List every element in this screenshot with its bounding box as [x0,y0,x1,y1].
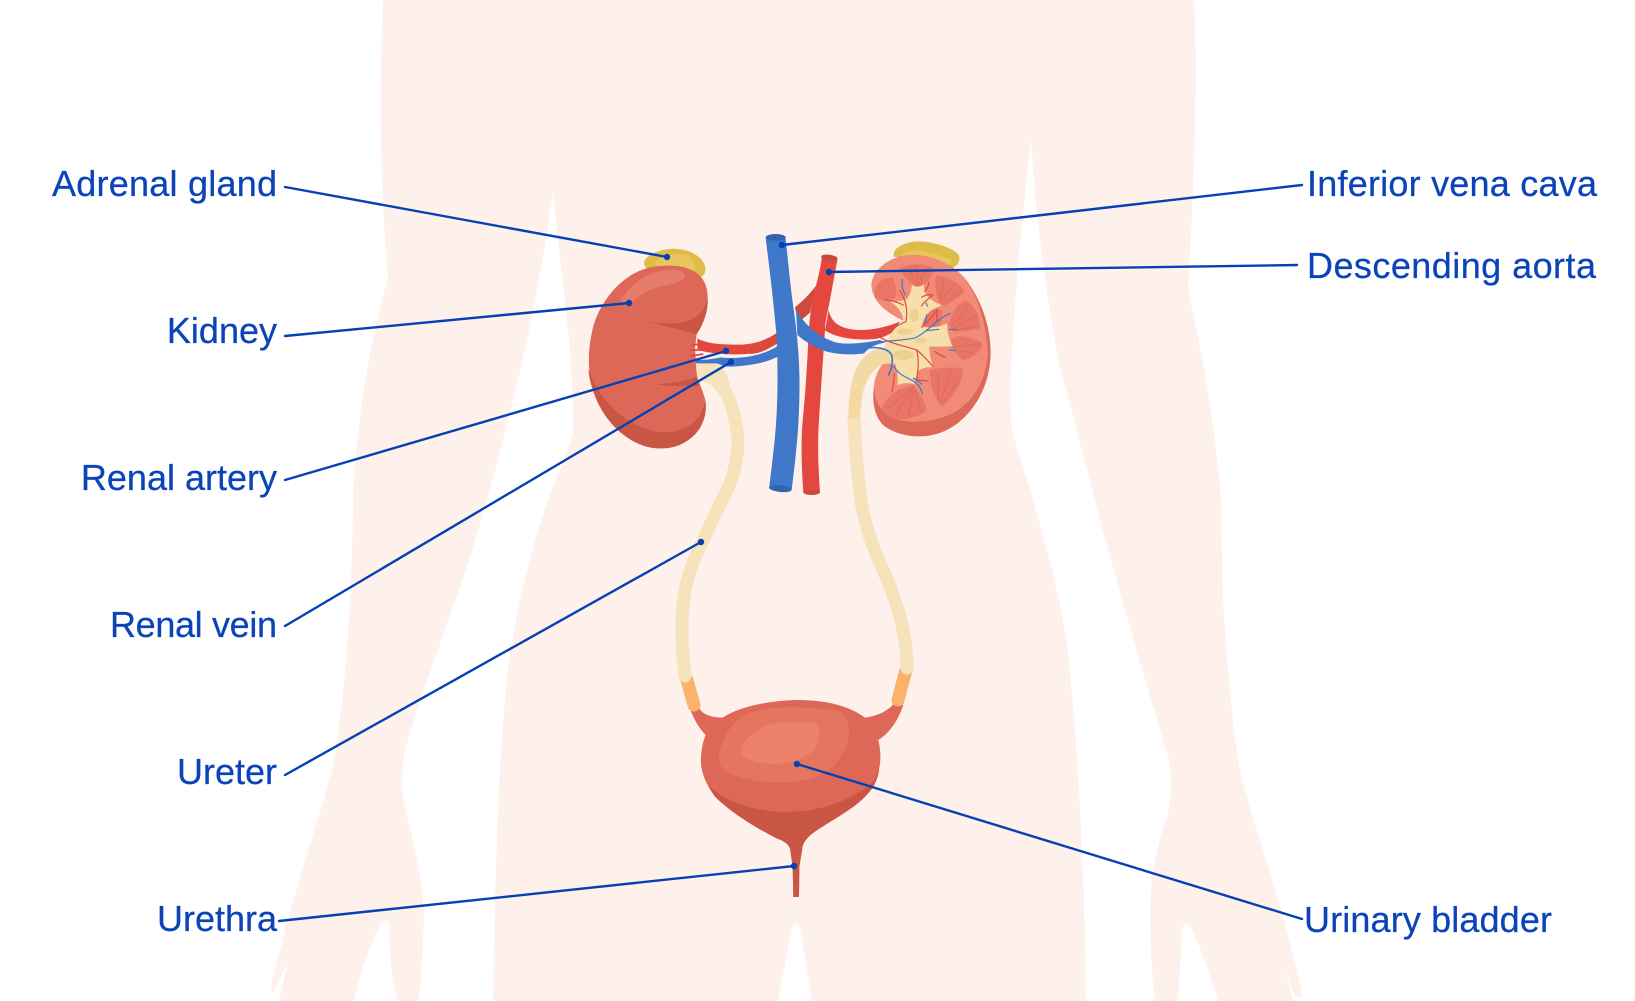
cortex [872,255,988,422]
label: Urinary bladder: Urinary bladder [1304,899,1552,940]
label: Inferior vena cava [779,163,1598,248]
renal branches: veins [867,279,957,394]
label: Renal artery [81,348,729,498]
right renal vein [796,308,892,375]
kidney upper shadow [647,298,708,334]
urinary bladder [690,700,903,897]
left renal artery [697,285,816,354]
pyramid fan lines [888,266,980,418]
label: Ureter: Ureter [177,751,277,792]
label: Adrenal gland [52,163,670,260]
renal branches: arteries [877,282,945,392]
left ureter [682,375,738,705]
right ureter [854,418,907,700]
left renal vein [696,343,793,367]
label: Ureter [177,539,704,792]
kidney lower notch shadow [656,377,700,386]
right renal pelvis and upper ureter [848,348,894,418]
label: Descending aorta: Descending aorta [1307,245,1597,286]
left kidney [588,266,708,448]
right kidney cross-section [867,255,991,436]
label: Urethra: Urethra [157,898,278,939]
label: Descending aorta [826,245,1597,286]
label: Renal vein: Renal vein [110,604,277,645]
organs group [588,234,991,495]
label: Urinary bladder [794,761,1552,940]
label: Renal vein [110,359,734,645]
pelvis ovals [893,308,927,360]
left renal pelvis [697,363,730,397]
label: Kidney [167,300,632,351]
hilum vessels [691,344,703,356]
body silhouette [271,0,1302,1001]
label: Renal artery: Renal artery [81,457,277,498]
inferior vena cava [766,234,800,493]
renal pelvis [883,284,953,385]
kidney highlight [621,270,685,306]
label: Urethra [157,863,797,939]
bladder shadow [708,768,879,897]
label: Adrenal gland: Adrenal gland [52,163,277,204]
label: Kidney: Kidney [167,310,277,351]
bladder inner highlight [741,722,820,764]
bladder highlight [719,707,849,782]
label: Inferior vena cava: Inferior vena cava [1307,163,1598,204]
kidney lower shadow [588,368,706,448]
pyramids [900,264,934,287]
dark area near pelvis [920,309,942,333]
descending aorta [802,254,838,495]
left adrenal gland [644,249,705,277]
right adrenal gland [894,241,959,268]
right renal artery [825,310,900,339]
